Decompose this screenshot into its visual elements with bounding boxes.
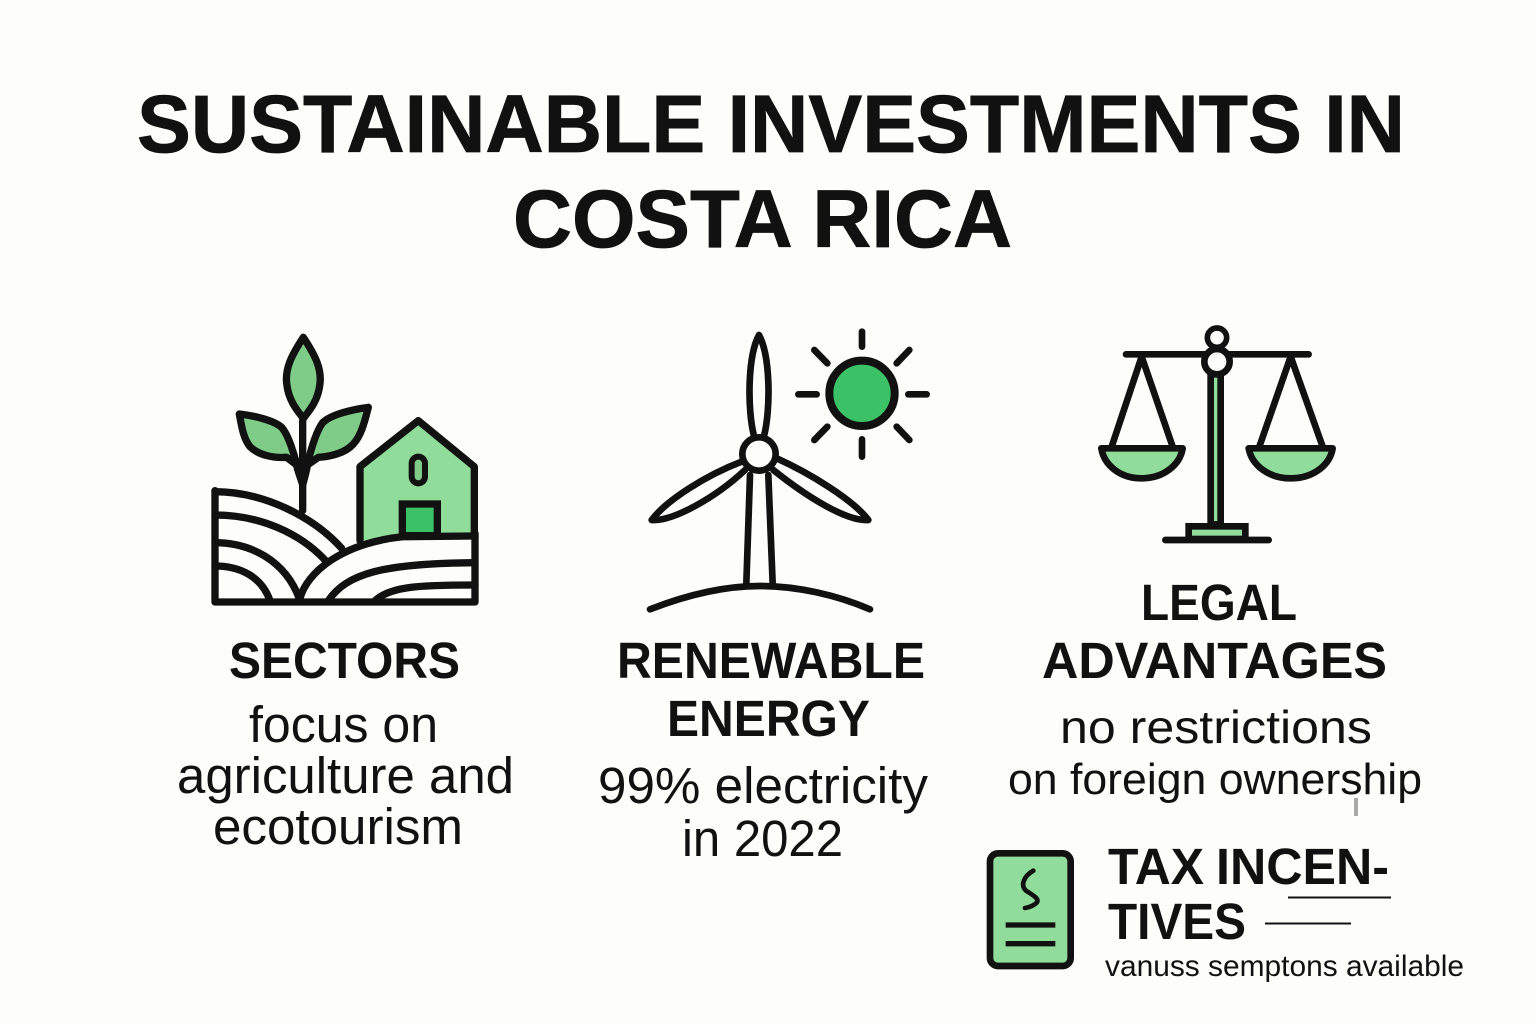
- heading: tax incentives: [1108, 838, 1389, 950]
- text: renewable description: [598, 757, 928, 867]
- text: legal description: no restrictions: [1060, 701, 1372, 753]
- text: renewable description: in 2022: [682, 810, 843, 867]
- text: sectors description: [177, 696, 514, 855]
- icon: wind turbine and sun: [650, 332, 927, 609]
- panel: tax incentives: [990, 838, 1464, 983]
- text: legal description: [1008, 701, 1422, 804]
- text: tax description: vanuss semptons available: [1105, 950, 1464, 983]
- heading: tax incentives: INCEN-: [1216, 838, 1389, 895]
- heading: legal advantages: ADVANTAGES: [1042, 632, 1387, 689]
- text: sectors description: ecotourism: [213, 798, 463, 855]
- heading: renewable energy: RENEWABLE: [617, 632, 925, 689]
- heading: renewable energy: [617, 632, 925, 747]
- panel: sectors: [177, 337, 514, 855]
- icon: tax document: [990, 853, 1071, 966]
- text: sectors description: focus on: [249, 696, 438, 753]
- heading: tax incentives: TIVES: [1108, 893, 1246, 950]
- text: legal description: on foreign ownership: [1008, 755, 1422, 804]
- heading: legal advantages: [1042, 574, 1387, 689]
- title: [137, 79, 1405, 265]
- text: renewable description: 99% electricity: [598, 757, 928, 814]
- title: SUSTAINABLE INVESTMENTS IN: [137, 79, 1405, 170]
- icon: plant and farm: [215, 337, 475, 602]
- heading: sectors: SECTORS: [229, 632, 460, 689]
- panel: legal advantages: [1008, 328, 1422, 804]
- heading: legal advantages: LEGAL: [1141, 574, 1297, 631]
- panel: renewable energy: [598, 332, 928, 867]
- icon: balance scales: [1101, 328, 1333, 540]
- heading: renewable energy: ENERGY: [667, 690, 870, 747]
- heading: tax incentives: TAX: [1108, 838, 1204, 895]
- text: sectors description: agriculture and: [177, 747, 514, 804]
- title: COSTA RICA: [513, 174, 1012, 265]
